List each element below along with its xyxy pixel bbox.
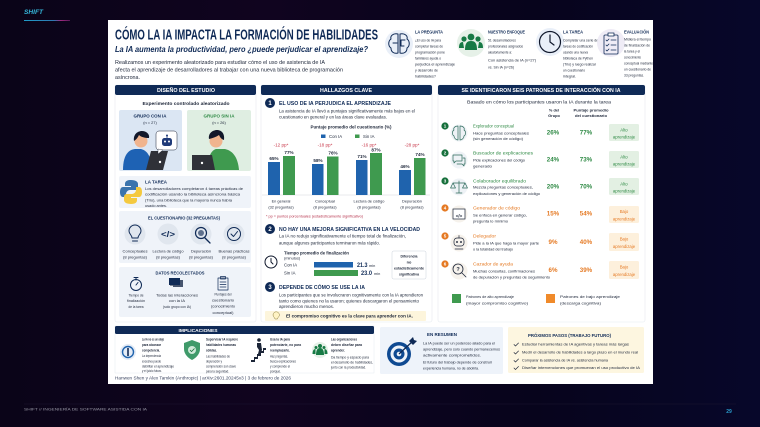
info: la tarea: biblioteca de Python [563,56,593,60]
checklist: Comparar la asistencia de IA vs. asistencia humana [522,358,609,362]
implication 1: y el juicio futuro. [142,368,162,373]
group: sin IA: (n = 26) [212,120,226,125]
info: la tarea: LA TAREA [563,30,584,34]
finding 1: La asistencia de IA llevó a puntajes significativamente más bajos en el [279,109,415,114]
panel: en resumen: La IA puede ser un poderoso aliado para el [423,340,495,346]
info: la pregunta: LA PREGUNTA [415,30,444,34]
implication 3: reemplazarte. [270,348,290,352]
checklist: Estudiar herramientas de IA agentivas y tareas más largas [522,342,629,346]
bar chart: puntaje promedio: -18 pp* [318,142,333,148]
column headers: Grupo [548,113,560,118]
bar chart: puntaje promedio: 77% [284,150,294,155]
pattern 6: 6 [444,262,447,267]
pattern 6: de depuración y preguntas de seguimiento [473,274,550,280]
finding 3: tanto como quienes no la usaron; quienes descargaron el pensamiento [279,298,420,304]
bar chart: puntaje promedio: En general [272,198,291,204]
slide footer [24,404,736,415]
info: la pregunta: programación pone [415,50,445,54]
pattern 3: 20% [547,184,560,191]
checklist [514,342,640,370]
info: evaluación: de finalización de [624,42,650,48]
group: con IA: GRUPO CON IA [134,114,166,118]
column headers: del cuestionario [575,113,608,118]
pattern 4: Generador de código [473,206,520,212]
box: el cuestionario: Depuración [191,248,211,254]
box: la tarea: LA TAREA [145,180,167,184]
pattern 4: 15% [547,210,560,218]
slide footer: SHIFT // INGENIERÍA DE SOFTWARE ASISTIDA CON IA [24,406,147,412]
pattern 6: Bajo [620,264,629,270]
pattern 5: 5 [444,234,447,239]
info: la pregunta [385,30,455,78]
bar chart: puntaje promedio: Lectura de código [354,198,384,204]
panel: próximos pasos [508,327,644,373]
pattern 6: ? [456,267,460,273]
icon: checklist [604,33,618,54]
pattern 5: Delegador [473,234,496,240]
callout: diferencia no significativa: estadísticamente [394,266,425,270]
finding 2: La IA no redujo significativamente el tiempo total de finalización, [279,234,406,239]
info: nuestro enfoque: 51 desarrolladores [488,38,516,42]
icon: people [459,34,483,50]
implication 2: comprensión son clave [206,364,236,368]
box: la tarea: codificación usando la biblioteca asíncrona básica [145,192,241,197]
finding 2: Con IA [284,262,297,268]
pattern 1: 77% [580,130,593,136]
pattern 1 [441,122,639,142]
box: el cuestionario: EL CUESTIONARIO (32 PREGUNTAS) [148,216,221,220]
info: la tarea: integral. [563,74,576,78]
pattern 6: Muchas consultas, confirmaciones [473,268,535,274]
icon: check [224,224,244,244]
implication 4: junto con la productividad. [330,364,366,370]
icon: target [387,337,417,366]
panel: en resumen: experiencia humana, no de abolirla. [423,366,479,370]
pattern 2: aprendizaje [613,162,636,166]
info: la pregunta: ¿El uso de IA para [415,38,442,42]
finding 1: 1 [268,101,272,107]
pattern 1: Alto [620,128,628,132]
finding 2 [265,224,426,279]
box: datos recolectados: DATOS RECOLECTADOS [156,271,205,276]
pattern 3: 70% [580,184,593,191]
pattern 5: 40% [580,239,593,246]
icon: bulb [124,224,146,244]
white slide card [108,20,653,384]
info: evaluación [597,28,653,78]
pattern 4: 54% [580,210,593,218]
intro text: asíncrona. [115,75,140,81]
box: datos recolectados: (solo grupo con IA) [163,304,192,309]
finding 1: EL USO DE IA PERJUDICA EL APRENDIZAJE [279,101,391,107]
pattern 6: 39% [580,267,593,274]
implication 4: deben diseñar para [331,342,363,347]
panel: diseño del estudio [115,85,256,322]
pattern 6: aprendizaje [613,272,636,277]
box: la tarea: Los desarrolladores completaron 4 tareas prácticas de [145,186,243,191]
pattern 6: 6% [549,267,558,274]
finding 3: 3 [268,285,272,291]
bar chart: puntaje promedio: (32 preguntas) [268,204,294,210]
panel: en resumen: El futuro del trabajo depende de construir [423,360,493,364]
box: datos recolectados: cuestionario [212,298,234,302]
info: la pregunta: familiares ayuda o [415,56,441,60]
bar chart: puntaje promedio: 74% [415,152,425,157]
implication 1 [120,336,174,373]
callout: compromiso cognitivo: El compromiso cognitivo es la clave para aprender con IA. [286,314,413,320]
info: la tarea [536,28,598,78]
panel: patrones de interacción [438,85,645,322]
finding 2: aunque algunos participantes terminaron más rápido. [279,240,380,246]
box: datos recolectados: conceptual) [212,310,234,315]
box: el cuestionario [119,211,251,263]
bar chart: puntaje promedio: Conceptual [315,198,335,204]
bar chart: puntaje promedio: 87% [371,148,381,152]
finding 3: aprendieron mucho menos. [279,304,334,309]
box: la tarea: (Trio), una biblioteca que la mayoría nunca había [145,197,233,202]
box: datos recolectados: Puntajes del [214,292,232,296]
pattern 6 [441,260,639,280]
pattern 1: 1 [444,124,447,129]
pattern 4: Bajo [620,209,629,214]
checklist: Medir el desarrollo de habilidades a largo plazo en el mundo real [522,350,638,354]
pattern 5: 9% [549,239,558,246]
box: el cuestionario: Conceptuales [122,248,148,254]
pattern 6: Cazador de ayuda [473,262,513,268]
pattern 4: </> [456,214,463,218]
citation footer: Hanwen Shen y Alex Tamkin (Anthropic) | arXiv:2601.20245v3 | 3 de febrero de 2026 [115,376,291,380]
box: datos recolectados: Todas las interacciones [156,292,198,298]
pattern 4: 4 [444,206,447,211]
intro text: afecta el aprendizaje de desarrolladores al trabajar con una nueva biblioteca de programación [115,67,343,73]
panel: implicaciones [115,326,374,374]
info: evaluación: conocimiento [624,54,641,60]
info: evaluación: 33 preguntas. [624,72,644,78]
box: datos recolectados [119,267,251,317]
info: la tarea: (Trio) y luego realizar [563,62,597,66]
icon: code: </> [161,229,175,239]
pattern 5: Bajo [620,236,629,242]
icon: clock [540,32,560,52]
implication 1: para alcanzar [142,342,161,347]
group: con IA: (n = 27) [143,120,157,125]
pattern 2: Buscador de explicaciones [473,151,534,157]
finding 2: NO HAY UNA MEJORA SIGNIFICATIVA EN LA VELOCIDAD [279,227,420,233]
bar chart: puntaje promedio: (8 preguntas) [313,204,337,210]
box: datos recolectados: finalización [127,298,145,303]
pattern 2: 73% [580,156,593,164]
heading: implicaciones: IMPLICACIONES [178,328,218,333]
pattern 2: Pide explicaciones del código [473,158,525,162]
implication 1: La IA no es un atajo [142,336,164,342]
bar chart: puntaje promedio: 76% [328,150,338,156]
box: datos recolectados: Tiempo de [128,292,144,298]
implication 4 [312,336,373,370]
implication 3: porqué. [270,368,281,374]
panel: en resumen: aprendizaje, pero solo cuando permanecemos [423,346,500,352]
pattern 5 [441,232,639,252]
group: sin IA [187,110,251,171]
box: datos recolectados: (conocimiento [211,304,235,308]
info: la pregunta: y desarrollo de [415,68,438,72]
panel: próximos pasos: PRÓXIMOS PASOS (TRABAJO FUTURO) [528,331,611,339]
bar chart: puntaje promedio: Sin IA [363,134,375,139]
panel: en resumen: activamente comprometidos. [423,352,481,358]
heading: hallazgos clave: HALLAZGOS CLAVE [320,88,373,94]
pattern 1: Hace preguntas conceptuales [473,130,529,136]
icon: brain [389,34,409,53]
pattern 1: Explorador conceptual [473,124,514,130]
pattern 1: aprendizaje [613,134,636,140]
implication 4: aprender. [331,348,345,352]
finding 1: cuestionario en general y en las áreas clave evaluadas. [279,115,387,120]
finding 2: 21.3 [357,263,368,269]
implication 3: Haz preguntas, [270,354,288,358]
bar chart: puntaje promedio: (8 preguntas) [357,204,381,210]
finding 2: (minutos) [284,256,301,260]
info: la pregunta: perjudica el aprendizaje [415,62,455,66]
info: la tarea: un cuestionario [563,68,585,72]
info: la tarea: Completar una serie de [563,38,598,42]
pattern 3: aprendizaje [613,188,636,194]
implication 2: depuración y [206,358,222,364]
panel: hallazgos clave [261,85,432,322]
bar chart: puntaje promedio: -28 pp* [405,142,420,148]
pattern 5: o la totalidad del trabajo [473,246,513,252]
implication 2: habilidades humanas [206,342,236,347]
info: evaluación: EVALUACIÓN [624,28,650,34]
finding 2: min [374,271,380,276]
implication 2: sólidas. [206,348,217,352]
box: el cuestionario: (8 preguntas) [123,254,148,260]
bar chart: puntaje promedio: -12 pp* [274,142,289,148]
info: nuestro enfoque: aleatoriamente a: [488,50,512,54]
implication 4: Da tiempo y espacio para [331,354,370,360]
finding 2: min [369,263,375,268]
box: el cuestionario: (8 preguntas) [156,254,181,260]
icon: magnifier [190,224,212,244]
box: datos recolectados: con la IA [169,298,185,303]
implication 4: Las organizaciones [331,336,357,342]
finding 2: 2 [268,227,272,233]
icon: bulb [273,312,279,319]
box: el cuestionario: Lectura de código [152,248,184,254]
legend: patterns: (mayor compromiso cognitivo) [466,300,529,306]
icon: clock [265,256,277,268]
pattern 3: 3 [444,179,447,184]
panel: patrones de interacción: Basado en cómo los participantes usaron la IA durante la tarea [467,100,611,106]
info: la pregunta: habilidades? [415,74,437,78]
info: la pregunta: completar tareas de [415,44,443,48]
checklist: Diseñar intervenciones que promuevan el uso productivo de IA [522,365,640,370]
finding 3: Los participantes que se involucraron cognitivamente con la IA aprendieron [279,292,424,298]
bar chart: puntaje promedio: Depuración [402,198,422,204]
implication 4: el desarrollo de habilidades, [331,360,373,364]
icon: stopwatch [130,278,142,290]
bar chart: puntaje promedio: 71% [357,154,367,159]
implication 2: para la seguridad. [206,368,229,374]
bar chart: puntaje promedio: (8 preguntas) [400,204,424,210]
icon: clipboard [218,276,228,290]
group: sin IA: GRUPO SIN IA [204,114,234,118]
bar chart: puntaje promedio: -16 pp* [362,142,377,148]
intro text [115,60,343,81]
legend: patterns: Patrones de bajo aprendizaje [560,294,620,299]
implication 1: competencia. [142,348,160,352]
pattern 4: Se enfoca en generar código, [473,212,527,218]
panel: en resumen [380,327,503,374]
implication 2: Supervisar IA requiere [206,336,239,342]
box: la tarea: usado antes. [145,203,167,208]
box: datos recolectados: de la tarea [128,304,144,309]
heading: diseño del estudio: DISEÑO DEL ESTUDIO [157,87,215,94]
finding 3 [265,282,424,309]
pattern 4: aprendizaje [613,216,636,222]
column headers: % del [549,108,559,112]
implication 1: debilitar el aprendizaje [142,364,174,368]
pattern 4 [441,204,639,224]
info: evaluación: conceptual mediante [624,60,653,66]
info: nuestro enfoque: profesionales asignados [488,44,523,48]
implication 3: y comprende el [270,364,290,368]
legend: patterns: (descarga cognitiva) [560,300,602,306]
info: nuestro enfoque: NUESTRO ENFOQUE [488,30,525,34]
pattern 3: Alto [620,182,628,186]
implication 3 [251,336,302,374]
bar chart: puntaje promedio: 58% [313,158,323,163]
info: la tarea: tareas de codificación [563,44,593,48]
implication 3: Usa la IA para [270,336,291,342]
pattern 1: 26% [547,130,560,136]
intro text: Realizamos un experimento aleatorizado para estudiar cómo el uso de asistencia de IA [115,60,325,66]
pattern 2: 2 [444,151,447,156]
box: el cuestionario: (8 preguntas) [189,254,214,260]
finding 2: Tiempo promedio de finalización [284,250,349,256]
legend: patterns [452,294,620,306]
finding 3: DEPENDE DE CÓMO SE USE LA IA [279,283,365,291]
box: el cuestionario: (8 preguntas) [222,254,247,260]
footnote: * pp = puntos porcentuales (estadísticamente significativo) [266,214,364,218]
group: con IA [119,110,182,171]
info: la tarea: usando una nueva [563,50,589,54]
implication 1: La dependencia [142,353,162,358]
callout: diferencia no significativa [392,251,426,279]
info: evaluación: un cuestionario de [624,66,651,72]
column headers: Puntaje promedio [574,108,609,112]
pattern 3: Colaborador equilibrado [473,179,526,185]
implication 3: potenciarte, no para [270,342,302,347]
info: evaluación: la tarea y el [624,48,640,54]
legend: patterns: Patrones de alto aprendizaje [466,294,514,299]
finding 1 [265,98,415,120]
bar chart: puntaje promedio: Puntaje promedio del cuestionario (%) [310,125,392,130]
experiment label: Experimento controlado aleatorizado [142,101,230,107]
implication 1: excesiva puede [142,358,161,363]
brand header: SHIFT [24,9,44,16]
box: el cuestionario: Buenas prácticas [218,248,250,254]
box: la tarea [119,176,251,208]
pattern 4: pregunta lo mínimo [473,218,508,224]
implication 2: Las habilidades de [206,354,230,358]
bar chart: puntaje promedio: 65% [269,156,279,161]
pattern 3 [441,177,639,196]
pattern 5: Pide a la IA que haga la mayor parte [473,240,539,246]
finding 2: 23.0 [361,271,373,277]
bar chart: puntaje promedio [262,125,430,210]
pattern 2: Alto [620,154,628,160]
pattern 3: explicaciones y generación de código [473,191,540,196]
info: nuestro enfoque [457,29,537,70]
column headers [548,108,609,118]
callout: compromiso cognitivo [265,311,426,321]
heading: seis patrones: SE IDENTIFICARON SEIS PATRONES DE INTERACCIÓN CON IA [462,86,621,94]
info: nuestro enfoque: vs. Sin IA (n=26) [488,64,515,70]
finding 2: Sin IA [284,270,296,276]
bar chart: puntaje promedio: 46% [400,164,410,169]
callout: diferencia no significativa: no [407,260,412,264]
panel: en resumen: EN RESUMEN [427,332,458,338]
callout: diferencia no significativa: Diferencia [400,254,418,258]
callout: diferencia no significativa: significativa [399,272,420,276]
icon: robot speech bubble [156,131,177,154]
subtitle: La IA aumenta la productividad, pero ¿puede perjudicar el aprendizaje? [115,45,368,54]
pattern 5: aprendizaje [613,244,636,249]
pattern 1: (sin generación de código) [473,136,524,141]
bar chart: puntaje promedio: Con IA [329,134,342,139]
pattern 3: Mezcla preguntas conceptuales, [473,185,533,190]
implication 3: busca explicaciones [270,358,296,364]
title: CÓMO LA IA IMPACTA LA FORMACIÓN DE HABILIDADES [115,26,378,44]
slide footer: 29 [726,409,732,415]
pattern 2: generado [473,164,492,168]
pattern 2: 24% [547,156,560,164]
info: nuestro enfoque: Con asistencia de IA (n=27) [488,58,537,62]
brand header [24,9,70,21]
implication 2 [184,336,239,374]
icon: chat [169,278,183,287]
info: evaluación: Midiera el tiempo [624,36,651,42]
icon: python logo [120,180,142,204]
pattern 2 [441,149,639,168]
